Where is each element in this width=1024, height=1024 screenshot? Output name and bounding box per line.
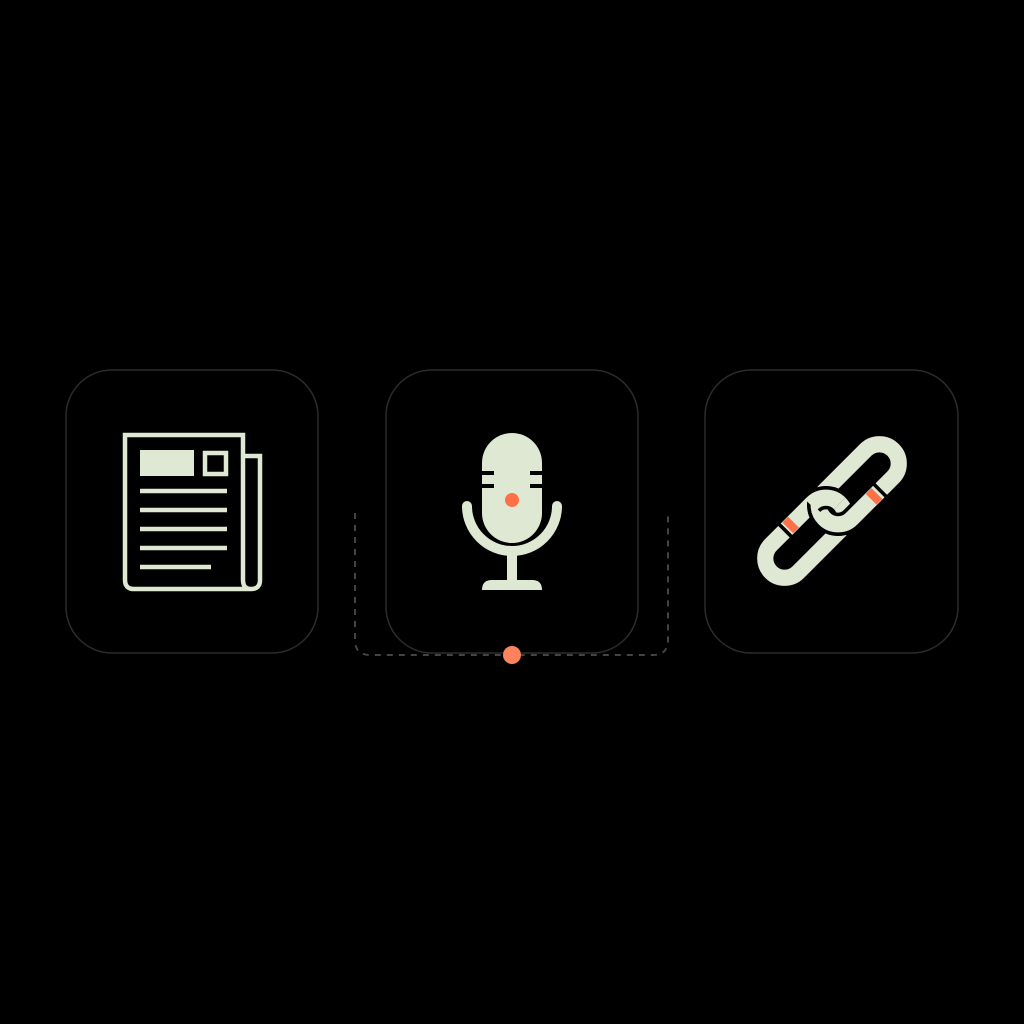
panel: microphone card xyxy=(386,370,638,653)
icon: microphone xyxy=(467,433,557,590)
icon: chain link xyxy=(757,436,907,586)
panel: link card xyxy=(705,370,958,653)
icon: newspaper xyxy=(125,435,260,589)
connector dot xyxy=(503,646,521,664)
dashed connector frame xyxy=(355,513,668,655)
panel: newspaper card xyxy=(66,370,318,653)
